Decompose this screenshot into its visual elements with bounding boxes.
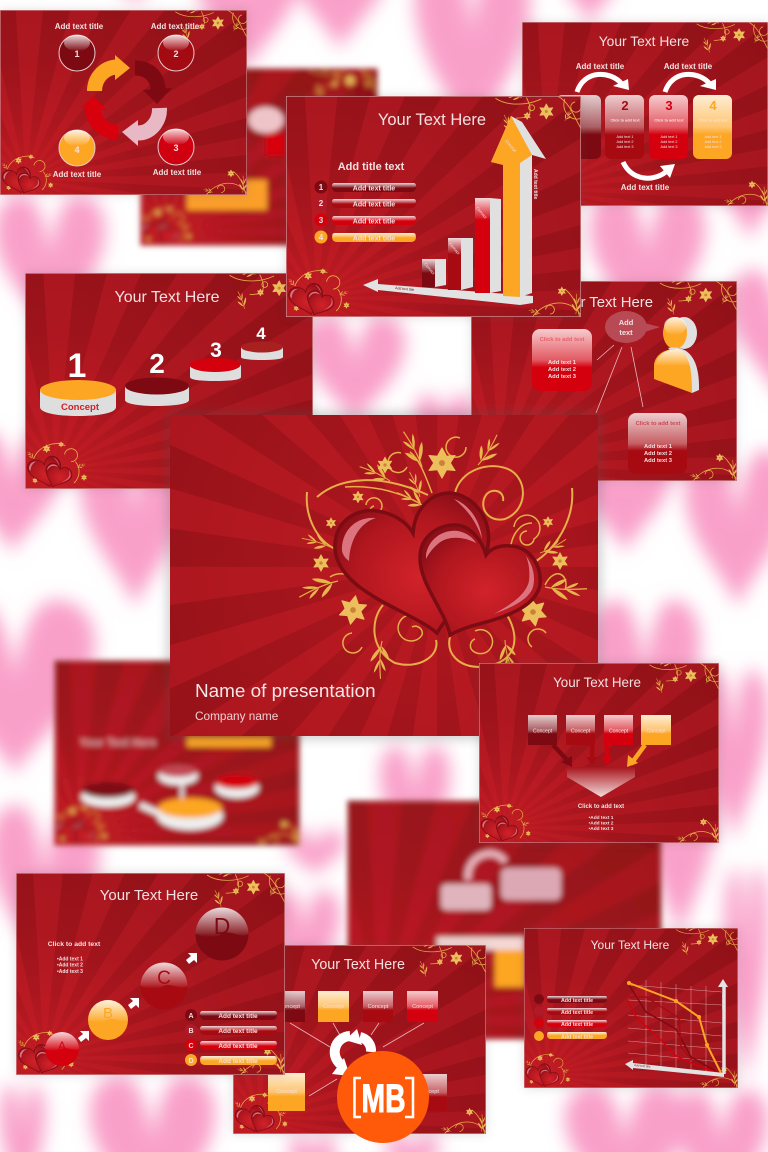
process cards: Add text 1	[616, 135, 634, 139]
process cards: Click to add text	[698, 118, 728, 122]
red text card: Add text 3	[548, 374, 577, 380]
legend list	[314, 180, 416, 244]
heading: Your Text Here	[115, 289, 220, 306]
legend list: D	[188, 1058, 194, 1065]
slide: four stacked discs	[0, 182, 469, 489]
dark red text card: Add text 3	[644, 458, 673, 464]
cycle arrows	[93, 67, 160, 133]
connector lines	[290, 1023, 424, 1096]
process cards: Add text 2	[660, 140, 678, 144]
concept boxes: Concept	[368, 1004, 389, 1010]
heading: Your Text Here	[553, 675, 641, 690]
process cards: Click to add text	[654, 118, 684, 122]
disc 3: 3	[210, 339, 222, 362]
disc 3	[190, 339, 241, 381]
dark red text card: Add text 1	[644, 444, 673, 450]
logo: MB orange circle badge	[337, 1051, 429, 1143]
blurred back slide: upper centre	[0, 0, 507, 246]
process cards: 3	[665, 98, 673, 113]
legend list: Add text title	[561, 998, 593, 1004]
heading: Your Text Here	[555, 295, 653, 311]
disc 2	[125, 348, 189, 406]
concept boxes: Concept	[609, 728, 629, 734]
concept boxes: Concept	[323, 1004, 344, 1010]
disc 2: 2	[149, 348, 165, 379]
concept boxes: Concept	[571, 728, 591, 734]
speech bubble	[605, 311, 660, 343]
line chart	[625, 979, 728, 1077]
legend list: B	[188, 1028, 194, 1035]
caption text	[578, 804, 624, 832]
concept boxes: Concept	[276, 1089, 297, 1095]
orb labels	[53, 22, 202, 179]
list title: Add title text	[338, 161, 405, 173]
curved arrow labels	[576, 62, 713, 192]
disc 1	[40, 347, 116, 416]
concept boxes: Concept	[279, 1004, 300, 1010]
legend list: Add text title	[561, 1022, 593, 1028]
numbered orbs	[59, 35, 194, 166]
slide: concept boxes merging into chevron	[160, 587, 768, 843]
body text: •Add text 1	[57, 956, 83, 962]
bar chart: Concept	[504, 138, 518, 154]
step spheres: C	[157, 968, 171, 989]
logo: MB orange circle badge: MB	[362, 1077, 406, 1121]
red text card: Add text 1	[548, 360, 577, 366]
slide: rising bar chart with arrow	[0, 3, 741, 317]
caption text: •Add text 3	[589, 826, 614, 832]
red text card: Click to add text	[540, 337, 584, 343]
bar chart: Concept	[475, 206, 488, 220]
slide: cycle with four orbs: 4	[74, 145, 80, 155]
slide: descending line chart	[239, 861, 768, 1088]
process cards: 4	[709, 98, 717, 113]
legend list: Add text title	[353, 236, 395, 242]
legend list: 3	[319, 216, 324, 225]
legend list	[185, 1009, 277, 1066]
disc 1: 1	[68, 347, 86, 385]
curved arrow labels: Add text title	[576, 62, 625, 71]
slide: cycle with four orbs: 3	[173, 143, 179, 153]
process cards: 2	[621, 98, 629, 113]
step arrows	[78, 953, 197, 1042]
body text: •Add text 3	[57, 969, 83, 975]
speech bubble: text	[619, 328, 633, 337]
slide: four-step process cards	[195, 0, 768, 206]
main title slide	[166, 402, 602, 740]
icon: person	[654, 317, 699, 393]
curved arrows	[577, 74, 710, 178]
heading: Your Text Here	[378, 111, 486, 129]
legend list	[534, 994, 607, 1041]
heading: Your Text Here	[591, 938, 670, 952]
body text: •Add text 2	[57, 962, 83, 968]
blurred back slide: lower centre	[0, 699, 768, 1040]
process cards: Add text 2	[616, 140, 634, 144]
legend list: Add text title	[218, 1058, 258, 1065]
legend list: Add text title	[353, 186, 395, 192]
caption text: Click to add text	[578, 804, 624, 810]
red text card: Add text 2	[548, 367, 576, 373]
step spheres: D	[214, 913, 230, 939]
line chart: Add text title	[721, 993, 725, 1010]
process cards: Add text 3	[616, 145, 634, 149]
process cards: Add text 3	[660, 145, 678, 149]
bar chart: Concept	[423, 262, 436, 276]
process cards: Add text 1	[704, 135, 722, 139]
legend list: Add text title	[353, 202, 395, 208]
orb labels: Add text title	[55, 22, 104, 31]
caption text: •Add text 1	[589, 815, 614, 821]
step spheres: A	[58, 1039, 66, 1053]
process cards: Click to add text	[610, 118, 640, 122]
concept boxes	[268, 991, 447, 1111]
slide: concept boxes around cycle arrows	[0, 866, 623, 1134]
icon: cycle arrows	[332, 1029, 371, 1076]
two glossy hearts	[335, 493, 540, 635]
disc 1: Concept	[61, 402, 100, 413]
bar chart: Add text title	[395, 286, 415, 292]
legend list: A	[188, 1013, 194, 1020]
concept boxes	[528, 715, 671, 745]
process cards: Add text 2	[704, 140, 722, 144]
bar chart: Add text title	[532, 169, 538, 199]
process cards: Add text 3	[704, 145, 722, 149]
down arrows	[553, 745, 645, 764]
concept boxes: Concept	[646, 728, 666, 734]
concept boxes: Concept	[412, 1004, 433, 1010]
body text: Click to add text	[48, 941, 101, 948]
legend list: Add text title	[218, 1043, 258, 1050]
slide: cycle with four orbs: 1	[74, 49, 80, 59]
large arrow	[491, 116, 546, 297]
concept boxes: Concept	[533, 728, 553, 734]
slide: cycle with four orbs: 2	[173, 49, 179, 59]
step spheres	[45, 908, 248, 1066]
concept boxes: Concept	[418, 1089, 439, 1095]
legend list: 1	[319, 183, 324, 192]
bar chart: Concept	[448, 242, 461, 256]
legend list: C	[188, 1043, 194, 1050]
slide: cycle with four orbs	[0, 0, 381, 195]
caption text: •Add text 2	[589, 820, 614, 826]
legend list: 2	[319, 199, 324, 208]
floral ornament	[295, 426, 588, 679]
heading: Your Text Here	[311, 957, 405, 973]
process cards: Add text 1	[660, 135, 678, 139]
heading: Your Text Here	[599, 34, 690, 49]
line chart: Add text title	[634, 1063, 651, 1069]
process cards	[556, 95, 732, 159]
disc 4	[241, 324, 283, 360]
dark red text card: Add text 2	[644, 451, 672, 457]
bar chart	[363, 116, 546, 305]
connector lines	[596, 345, 643, 413]
slide: person with speech bubble	[117, 197, 768, 481]
red text card	[532, 329, 592, 391]
step spheres: B	[103, 1005, 113, 1022]
orb labels: Add text title	[153, 168, 202, 177]
speech bubble: Add	[619, 318, 634, 327]
heading: Your Text Here	[100, 887, 198, 904]
legend list: Add text title	[353, 218, 395, 226]
dark red text card: Click to add text	[636, 421, 680, 427]
blurred back slide: left middle: Your Text Here	[80, 737, 156, 749]
logo brackets	[354, 1078, 413, 1117]
dark red text card	[628, 413, 687, 474]
orb labels: Add text title	[53, 170, 102, 179]
curved arrow labels: Add text title	[664, 62, 713, 71]
legend list: Add text title	[218, 1028, 258, 1035]
chevron	[567, 767, 635, 797]
slide: A B C D growing spheres	[0, 788, 431, 1075]
legend list: Add text title	[561, 1034, 593, 1040]
legend list: 4	[319, 233, 324, 242]
disc 4: 4	[256, 324, 266, 343]
presentation title: Name of presentation	[195, 681, 376, 702]
legend list: Add text title	[561, 1010, 593, 1016]
legend list: Add text title	[218, 1013, 258, 1020]
orb labels: Add text title	[151, 22, 200, 31]
company name: Company name	[195, 709, 279, 723]
blurred back slide: left middle	[0, 582, 433, 846]
curved arrow labels: Add text title	[621, 183, 670, 192]
body text	[48, 941, 101, 975]
